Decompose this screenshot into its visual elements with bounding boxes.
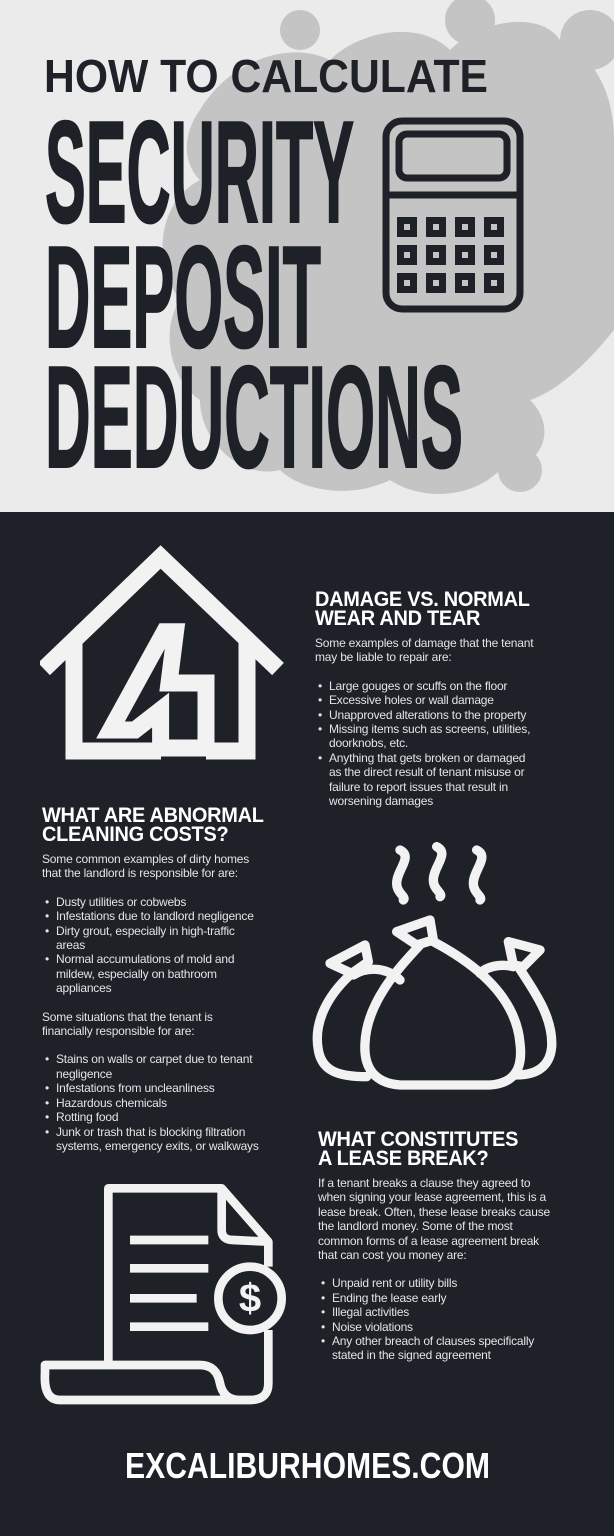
text: Large gouges or scuffs on the floor — [329, 679, 507, 693]
text: Normal accumulations of mold and — [56, 952, 234, 966]
text: Junk or trash that is blocking filtration — [56, 1124, 245, 1138]
text: Anything that gets broken or damaged — [329, 751, 525, 765]
text: negligence — [56, 1067, 112, 1081]
text: A LEASE BREAK? — [318, 1147, 488, 1170]
text: appliances — [56, 981, 111, 995]
text: WHAT CONSTITUTES — [318, 1128, 518, 1151]
text: as the direct result of tenant misuse or — [329, 765, 524, 779]
text: Unpaid rent or utility bills — [332, 1276, 457, 1290]
text: doorknobs, etc. — [329, 736, 408, 750]
text: lease break. Often, these lease breaks cause — [318, 1205, 550, 1219]
text: Dusty utilities or cobwebs — [56, 895, 186, 909]
text: Infestations from uncleanliness — [56, 1081, 215, 1095]
text: when signing your lease agreement, this is a — [318, 1190, 546, 1204]
text: Hazardous chemicals — [56, 1096, 167, 1110]
text: Dirty grout, especially in high-traffic — [56, 924, 235, 938]
text: stated in the signed agreement — [332, 1348, 491, 1362]
section: abnormal cleaning costs — [42, 804, 264, 1153]
text: Stains on walls or carpet due to tenant — [56, 1052, 252, 1066]
header panel — [0, 0, 614, 512]
section: damage vs normal wear — [315, 588, 534, 808]
text: DAMAGE VS. NORMAL — [315, 588, 530, 611]
icon: calculator — [382, 118, 524, 312]
text: Infestations due to landlord negligence — [56, 909, 254, 923]
text: If a tenant breaks a clause they agreed to — [318, 1176, 530, 1190]
footer url: EXCALIBURHOMES.COM — [125, 1445, 490, 1486]
text: common forms of a lease agreement break — [318, 1234, 539, 1248]
text: Any other breach of clauses specifically — [332, 1334, 534, 1348]
splash background — [162, 0, 614, 494]
icon: document with dollar — [40, 1184, 286, 1404]
section: lease break — [318, 1128, 550, 1362]
text: financially responsible for are: — [42, 1024, 194, 1038]
text: WEAR AND TEAR — [315, 607, 480, 630]
text: the landlord money. Some of the most — [318, 1219, 513, 1233]
text: may be liable to repair are: — [315, 650, 451, 664]
text: systems, emergency exits, or walkways — [56, 1139, 259, 1153]
text: worsening damages — [329, 794, 433, 808]
text: Illegal activities — [332, 1305, 409, 1319]
text: Missing items such as screens, utilities, — [329, 722, 530, 736]
text: failure to report issues that result in — [329, 780, 508, 794]
text: areas — [56, 938, 85, 952]
text: mildew, especially on bathroom — [56, 967, 217, 981]
text: Noise violations — [332, 1320, 413, 1334]
text: Unapproved alterations to the property — [329, 708, 526, 722]
icon: garbage bags — [312, 842, 556, 1090]
title: HOW TO CALCULATE — [44, 50, 488, 102]
text: that the landlord is responsible for are: — [42, 866, 238, 880]
title — [44, 50, 488, 498]
text: Rotting food — [56, 1110, 118, 1124]
icon: document with dollar: $ — [239, 1277, 261, 1321]
text: Some situations that the tenant is — [42, 1010, 213, 1024]
text: Some examples of damage that the tenant — [315, 636, 533, 650]
text: that can cost you money are: — [318, 1248, 466, 1262]
icon: house with lightning — [40, 545, 284, 760]
text: Some common examples of dirty homes — [42, 852, 249, 866]
text: WHAT ARE ABNORMAL — [42, 804, 264, 827]
text: Excessive holes or wall damage — [329, 693, 494, 707]
text: Ending the lease early — [332, 1291, 446, 1305]
text: CLEANING COSTS? — [42, 823, 228, 846]
